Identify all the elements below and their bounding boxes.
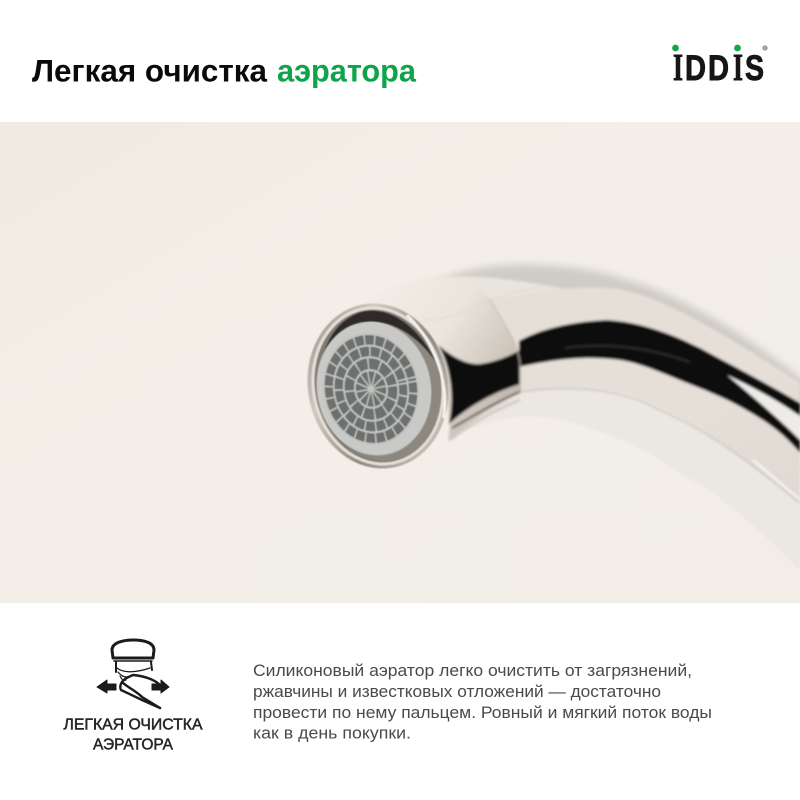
black reflection on nozzle xyxy=(438,345,520,424)
mesh disc xyxy=(324,334,418,444)
lower tube edge streaks xyxy=(520,389,800,503)
icon caption: АЭРАТОРА xyxy=(93,736,173,754)
logo: IDDIS xyxy=(672,45,767,89)
seam xyxy=(490,300,520,390)
streak under nozzle xyxy=(452,392,520,428)
soft top blend xyxy=(456,276,560,300)
title: Легкая очистка xyxy=(32,52,267,88)
title: аэратора xyxy=(277,52,416,88)
faucet tube xyxy=(419,276,800,504)
description text: как в день покупки. xyxy=(253,724,411,742)
logo: IDDIS: D xyxy=(708,49,729,88)
description text: ржавчины и известковых отложений — достаточно xyxy=(253,682,661,701)
highlight on black band xyxy=(727,375,800,440)
icon caption xyxy=(64,716,203,754)
left arrow xyxy=(97,680,116,693)
aerator rings xyxy=(117,668,150,680)
reflection line on nozzle top xyxy=(425,286,545,320)
bright right edge of rim xyxy=(407,311,450,421)
description text: Силиконовый аэратор легко очистить от загрязнений, xyxy=(253,661,692,680)
description text xyxy=(253,661,712,742)
central star xyxy=(356,371,386,407)
dark upper crescent xyxy=(323,310,436,362)
right arrow xyxy=(152,680,169,693)
tube body xyxy=(480,287,800,498)
faucet shadow on top edge xyxy=(430,264,800,420)
aerator body outline xyxy=(112,640,154,658)
black reflection on tube xyxy=(519,320,800,453)
finger xyxy=(122,675,160,708)
logo: IDDIS: I xyxy=(733,47,743,89)
aerator rim xyxy=(307,303,449,470)
panel: faucet photograph xyxy=(0,122,800,603)
icon: aerator cleaning with finger xyxy=(97,640,169,708)
description text: провести по нему пальцем. Ровный и мягкий поток воды xyxy=(253,703,712,722)
radial ribs xyxy=(324,334,418,444)
photo background xyxy=(0,122,800,603)
aerator insert xyxy=(316,320,432,456)
inner sleeve shading xyxy=(349,326,441,461)
logo: IDDIS: I xyxy=(673,47,683,89)
highlight in dark xyxy=(565,346,690,362)
nozzle body xyxy=(419,296,522,441)
lower tube band xyxy=(470,388,800,570)
logo: IDDIS: D xyxy=(685,49,706,88)
logo: IDDIS: S xyxy=(745,49,764,88)
title xyxy=(32,52,416,88)
icon caption: ЛЕГКАЯ ОЧИСТКА xyxy=(64,716,203,734)
